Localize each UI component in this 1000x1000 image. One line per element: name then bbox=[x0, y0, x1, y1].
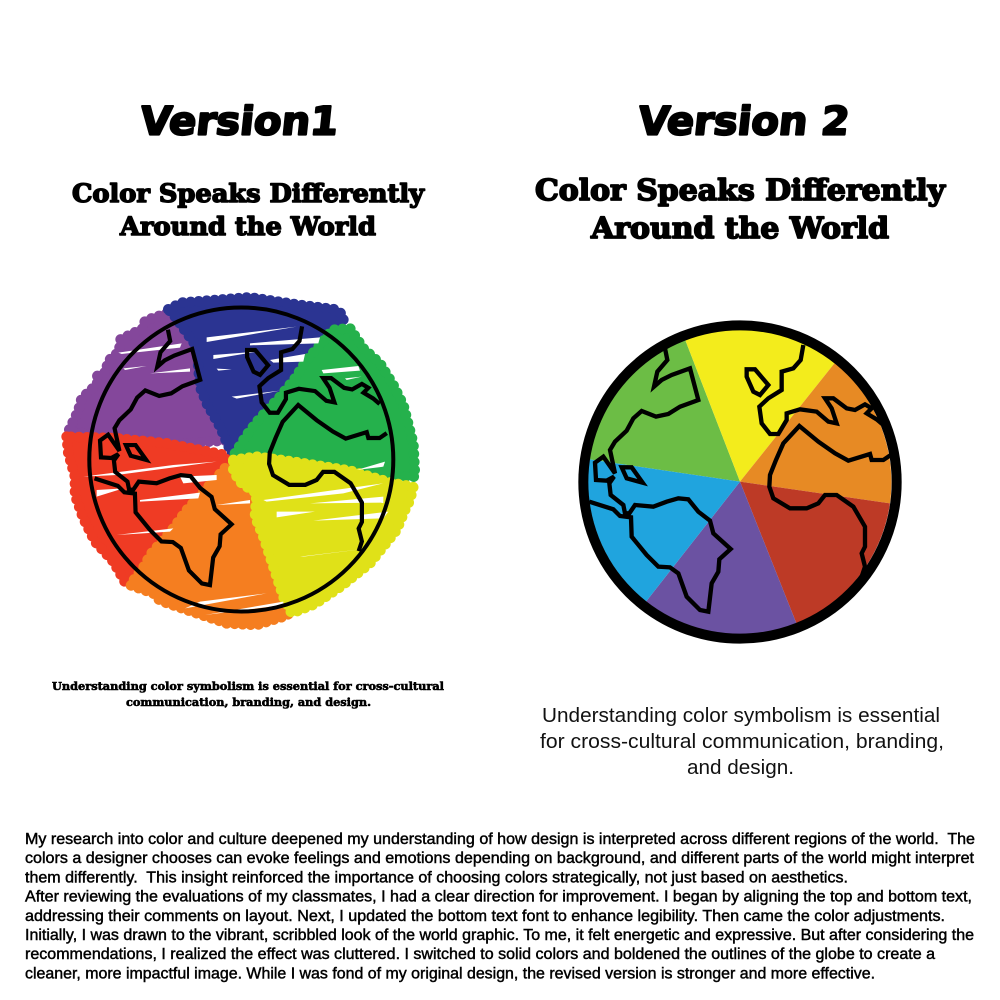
segment: green bbox=[589, 339, 740, 482]
reflection paragraph: recommendations, I realized the effect was cluttered. I switched to solid colors and boldened the outlines of the globe to create a bbox=[25, 946, 935, 963]
caption: version 2: and design. bbox=[687, 756, 794, 779]
segment: purple bbox=[646, 482, 797, 634]
reflection paragraph: Initially, I was drawn to the vibrant, scribbled look of the world graphic. To me, it felt energetic and expressive. But after considering the bbox=[25, 927, 974, 944]
heading: Version 1: Version1 bbox=[138, 100, 341, 144]
solid globe graphic bbox=[583, 325, 897, 639]
reflection paragraph: them differently. This insight reinforced the importance of choosing colors strategically, not just based on aesthetics. bbox=[25, 869, 848, 886]
title: Color Speaks Differently Around the World (version 1): Around the World bbox=[119, 212, 376, 241]
scribble: yellow segment bbox=[233, 457, 413, 613]
scribble: navy segment bbox=[168, 297, 343, 453]
reflection paragraph: After reviewing the evaluations of my classmates, I had a clear direction for improvement. I began by aligning the top and bottom text, bbox=[25, 889, 972, 906]
panel: version 1 bbox=[52, 100, 444, 709]
scribble: orange segment bbox=[130, 468, 288, 625]
segment: yellow bbox=[685, 330, 835, 482]
globe outline and continents (version 1) bbox=[89, 308, 393, 612]
scribble: red segment bbox=[67, 437, 228, 585]
caption: version 1 bbox=[52, 680, 444, 709]
globe ring bbox=[583, 325, 897, 639]
panel: version 2 bbox=[535, 100, 946, 779]
title: Color Speaks Differently Around the World (version 1) bbox=[72, 179, 426, 241]
segment: red bbox=[740, 482, 890, 624]
scribbled globe graphic bbox=[67, 297, 415, 625]
heading: Version 2: Version 2 bbox=[636, 100, 852, 144]
caption: version 2 bbox=[540, 704, 944, 779]
caption: version 1: communication, branding, and design. bbox=[126, 696, 371, 709]
reflection paragraph bbox=[25, 831, 975, 982]
white scribble gaps bbox=[83, 327, 388, 615]
reflection paragraph: colors a designer chooses can evoke feelings and emotions depending on background, and different parts of the world might interpret bbox=[25, 850, 975, 867]
reflection paragraph: My research into color and culture deepened my understanding of how design is interpreted across different regions of the world. The bbox=[25, 831, 975, 848]
segment: orange bbox=[740, 363, 891, 503]
caption: version 1: Understanding color symbolism is essential for cross-cultural bbox=[52, 680, 444, 693]
reflection paragraph: addressing their comments on layout. Next, I updated the bottom text font to enhance legibility. Then came the color adjustments. bbox=[25, 908, 945, 925]
reflection paragraph: cleaner, more impactful image. While I was fond of my original design, the revised version is stronger and more effective. bbox=[25, 965, 875, 982]
caption: version 2: for cross-cultural communication, branding, bbox=[540, 730, 944, 753]
title: Color Speaks Differently Around the World (version 2): Around the World bbox=[590, 211, 889, 245]
title: Color Speaks Differently Around the World (version 2) bbox=[535, 173, 946, 245]
scribble: purple segment bbox=[68, 313, 237, 445]
title: Color Speaks Differently Around the World (version 1): Color Speaks Differently bbox=[72, 179, 426, 208]
continents bbox=[589, 345, 891, 612]
title: Color Speaks Differently Around the World (version 2): Color Speaks Differently bbox=[535, 173, 946, 207]
scribble: green segment bbox=[235, 328, 415, 477]
segment: blue bbox=[588, 459, 740, 602]
caption: version 2: Understanding color symbolism is essential bbox=[542, 704, 940, 727]
